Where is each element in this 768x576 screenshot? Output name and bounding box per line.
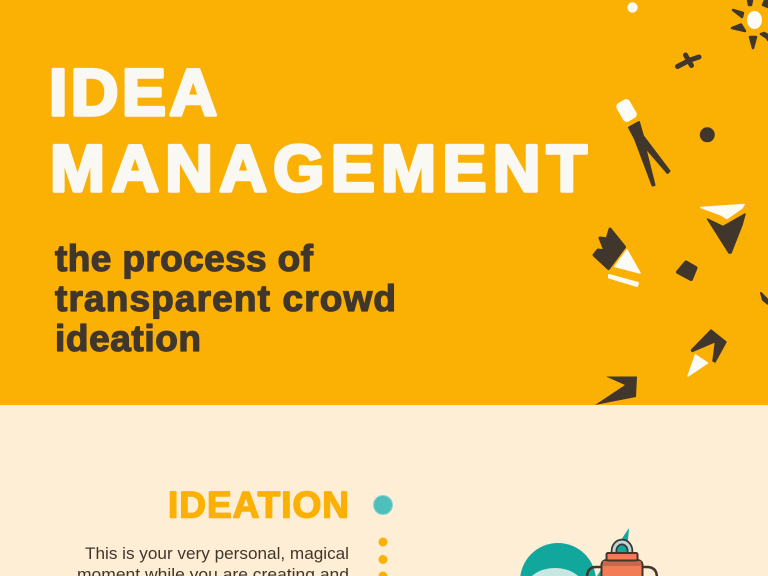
jar body <box>602 560 642 576</box>
jar loop <box>614 542 630 553</box>
title: IDEA <box>49 55 217 129</box>
timeline dots <box>374 496 392 576</box>
light dome window <box>525 568 585 576</box>
icon: edge shard <box>761 293 768 304</box>
lower panel background <box>0 405 768 576</box>
timeline node <box>374 496 392 514</box>
icon: dark dot <box>700 127 715 142</box>
decorative confetti shapes <box>594 0 768 405</box>
header panel background <box>0 0 768 405</box>
subtitle <box>55 238 396 359</box>
jar neck <box>606 553 638 560</box>
icon: white shard <box>688 355 708 376</box>
icon: pen compass legs <box>629 122 670 186</box>
subtitle: transparent crowd <box>55 278 396 319</box>
icon: white bar <box>609 275 638 286</box>
body text <box>77 545 349 576</box>
body text: This is your very personal, magical <box>85 545 349 563</box>
icon: dark chevron <box>692 330 726 362</box>
jar body shade <box>603 561 641 566</box>
teal spike <box>597 528 629 576</box>
icon: dark cross <box>678 55 699 66</box>
subtitle: the process of <box>55 238 314 279</box>
timeline dot <box>378 572 388 576</box>
teal dome <box>520 543 596 576</box>
timeline dot <box>378 538 388 546</box>
illustration: teal dome and jar <box>520 528 657 576</box>
icon: dark arrowhead <box>708 214 745 253</box>
icon: white wedge <box>701 204 744 218</box>
icon: bottom chevron <box>595 376 637 405</box>
timeline dot <box>378 555 388 564</box>
title: MANAGEMENT <box>50 131 587 205</box>
icon: dark diamond <box>678 262 696 279</box>
icon: crown <box>594 229 624 268</box>
icon: pen tip <box>615 98 638 123</box>
jar handles <box>587 567 657 576</box>
icon: sun <box>732 0 768 48</box>
title <box>49 55 587 205</box>
heading: ideation: IDEATION <box>168 484 349 526</box>
icon: white dot <box>627 2 638 13</box>
icon: white triangle <box>615 250 640 273</box>
jar loop highlight <box>614 542 630 553</box>
subtitle: ideation <box>55 318 201 359</box>
